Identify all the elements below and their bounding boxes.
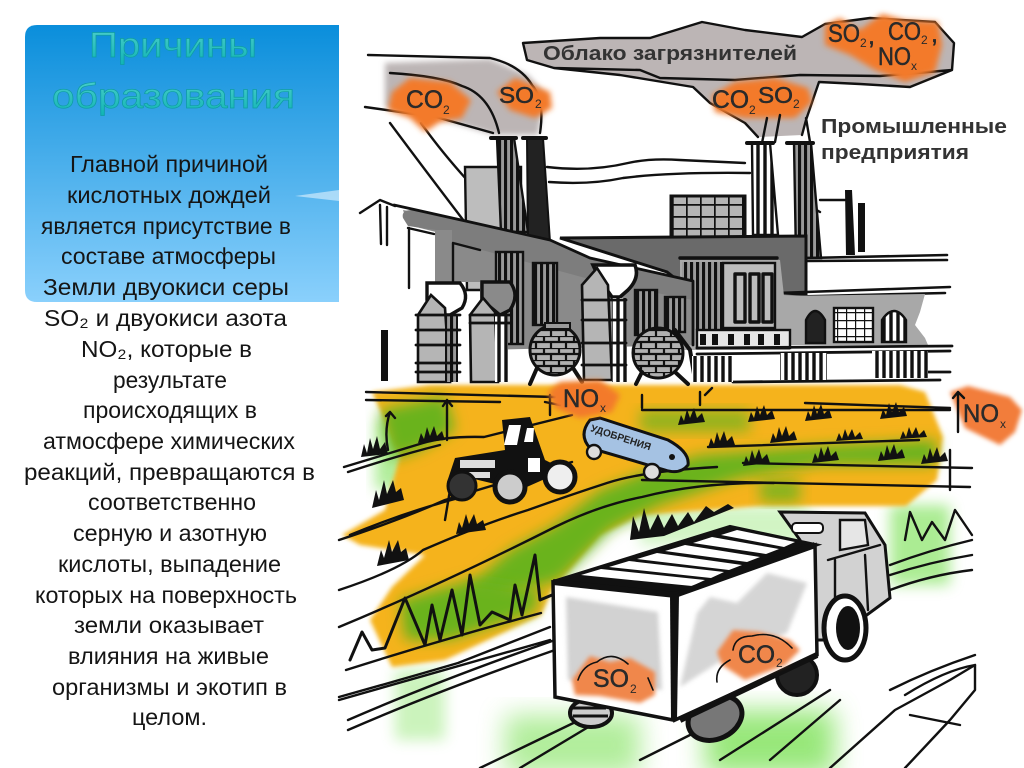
- text block: main cause of acid rain: Земли двуокиси серы: [43, 274, 289, 300]
- orange NOx labels: [548, 380, 1022, 445]
- SO2 CO2 NOx cloud, top right: x: [911, 59, 917, 73]
- CO2 cloud, left: 2: [443, 103, 450, 117]
- text block: main cause of acid rain: NO₂, которые в: [81, 336, 252, 362]
- yellow field: [342, 385, 943, 667]
- text block: main cause of acid rain: является присутствие в: [41, 213, 291, 239]
- text block: main cause of acid rain: [24, 151, 315, 730]
- SO2 cloud, truck front: 2: [630, 682, 637, 696]
- main sloped roof and wall: [360, 200, 693, 381]
- base rows: [697, 346, 952, 382]
- crops and upward arrows: [361, 388, 950, 566]
- truck: [553, 512, 890, 749]
- SO2 cloud, left: SO: [499, 82, 534, 108]
- illustration: field colour wash: [342, 385, 950, 768]
- wheels: [570, 655, 817, 749]
- text block: main cause of acid rain: результате: [113, 367, 227, 393]
- spheres: [530, 323, 695, 384]
- SO2 cloud, left: 2: [535, 97, 542, 111]
- NOx cloud, field: [548, 380, 620, 418]
- caption: industrial enterprises: Промышленные: [821, 116, 1007, 138]
- CO2 cloud, truck side: 2: [776, 656, 783, 670]
- NOx cloud, right edge: [950, 386, 1022, 445]
- right chimneys: [747, 115, 821, 258]
- title: [52, 26, 295, 116]
- caption: pollutant cloud: Облако загрязнителей: [543, 43, 797, 65]
- caption: industrial enterprises: предприятия: [821, 142, 969, 164]
- tall tank: [582, 265, 636, 382]
- back building: [465, 167, 524, 290]
- SO2 cloud, left: [497, 78, 552, 118]
- cab: [780, 512, 890, 660]
- box roof: [553, 527, 815, 595]
- text block: main cause of acid rain: целом.: [132, 704, 207, 730]
- text block: main cause of acid rain: земли оказывает: [74, 612, 264, 638]
- SO2 CO2 NOx cloud, top right: [825, 14, 942, 82]
- background sky lines: [547, 159, 845, 212]
- CO2 and SO2 cloud, centre: SO: [758, 82, 793, 108]
- second tank: [470, 282, 515, 382]
- CO2 cloud, left: [388, 78, 471, 132]
- text block: main cause of acid rain: SO₂ и двуокиси азота: [44, 305, 287, 331]
- caption: industrial enterprises: [821, 116, 1007, 164]
- text block: main cause of acid rain: которых на поверхность: [35, 582, 297, 608]
- title: образования: [52, 77, 295, 116]
- tall grass: [350, 504, 972, 660]
- smoke cloud: pollutant cloud: [523, 18, 954, 137]
- text block: main cause of acid rain: соответственно: [88, 489, 256, 515]
- SO2 CO2 NOx cloud, top right: ,: [868, 22, 875, 50]
- CO2 and SO2 cloud, centre: CO: [712, 86, 749, 114]
- CO2 cloud, left: CO: [406, 86, 443, 114]
- rear wall lines: [777, 255, 950, 297]
- text block: main cause of acid rain: кислоты, выпадение: [58, 551, 281, 577]
- SO2 CO2 NOx cloud, top right: 2: [860, 36, 867, 50]
- CO2 and SO2 cloud, centre: 2: [749, 103, 756, 117]
- box front: [553, 582, 675, 720]
- CO2 and SO2 cloud, centre: 2: [793, 97, 800, 111]
- right wing: [777, 294, 928, 345]
- thin pipes at right: [845, 190, 865, 255]
- left chimneys: [491, 138, 550, 242]
- hall windows: [496, 252, 685, 344]
- tractor: [447, 417, 575, 502]
- text block: main cause of acid rain: составе атмосферы: [61, 243, 276, 269]
- text block: main cause of acid rain: реакций, превращаются в: [24, 459, 315, 485]
- text block: main cause of acid rain: организмы и экотип в: [52, 674, 287, 700]
- box side: [675, 545, 817, 720]
- light green patches: [375, 420, 950, 768]
- dark rear wing: [560, 236, 806, 294]
- SO2 CO2 NOx cloud, top right: NO: [878, 43, 911, 71]
- left tank: [416, 283, 466, 382]
- central block: [680, 258, 790, 350]
- SO2 CO2 NOx cloud, top right: SO: [828, 20, 860, 48]
- fertilizer tanker: [584, 418, 688, 480]
- SO2 CO2 NOx cloud, top right: CO: [888, 18, 921, 46]
- fertilizer tanker: УДОБРЕНИЯ: [589, 423, 652, 453]
- SO2 CO2 NOx cloud, top right: 2: [921, 33, 928, 47]
- panel: blue gradient header: [25, 25, 339, 302]
- green bands: [380, 395, 937, 640]
- NOx cloud, field: x: [600, 401, 606, 415]
- text block: main cause of acid rain: серную и азотную: [73, 520, 267, 546]
- text block: main cause of acid rain: происходящих в: [83, 397, 257, 423]
- orange labels on smoke: [388, 14, 942, 132]
- NOx cloud, right edge: x: [1000, 417, 1006, 431]
- CO2 cloud, truck side: CO: [738, 641, 775, 669]
- SO2 cloud, truck front: SO: [593, 665, 629, 693]
- window block: [680, 196, 744, 236]
- field rows and road lines: [339, 392, 975, 768]
- factory illustration: [360, 115, 952, 384]
- text block: main cause of acid rain: кислотных дождей: [67, 182, 271, 208]
- SO2 CO2 NOx cloud, top right: ,: [931, 20, 938, 48]
- NOx cloud, field: NO: [563, 385, 599, 413]
- title: Причины: [89, 26, 257, 65]
- NOx cloud, right edge: NO: [963, 400, 999, 428]
- text block: main cause of acid rain: влияния на живые: [68, 643, 269, 669]
- text block: main cause of acid rain: атмосфере химических: [43, 428, 295, 454]
- smoke plume: left chimneys: [365, 55, 545, 225]
- CO2 cloud, truck side: [717, 630, 800, 682]
- CO2 and SO2 cloud, centre: [712, 78, 812, 118]
- text block: main cause of acid rain: Главной причиной: [70, 151, 268, 177]
- SO2 cloud, truck front: [572, 656, 655, 703]
